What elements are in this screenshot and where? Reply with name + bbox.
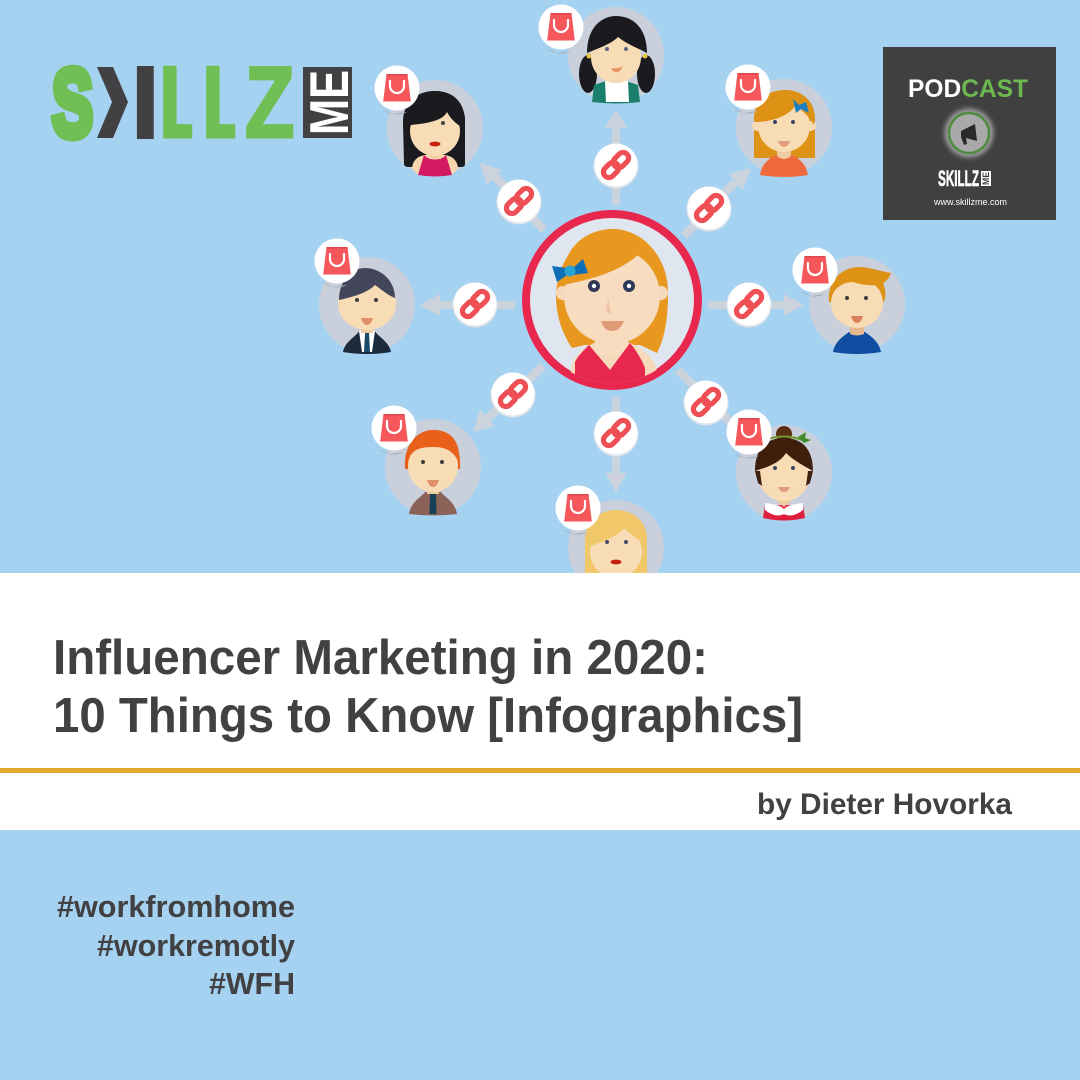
podcast small logo: ME — [981, 172, 991, 185]
icon: shopping bag badge, orange-haired girl — [726, 64, 770, 113]
central influencer avatar — [526, 214, 698, 395]
follower: bun-haired girl — [736, 425, 832, 521]
gold divider — [0, 768, 1080, 773]
title: 10 Things to Know [Infographics] — [53, 689, 803, 743]
icon: chain link, right — [726, 282, 772, 328]
arrow: to bottom follower — [605, 397, 627, 492]
podcast url: www.skillzme.com — [933, 197, 1007, 207]
icon: chain link, upper right — [686, 186, 732, 232]
arrow: to upper-left follower — [480, 163, 547, 233]
icon: chain link, left — [452, 282, 498, 328]
icon: shopping bag badge, blond boy — [792, 248, 838, 296]
title — [53, 631, 803, 743]
follower: orange-haired girl with bow — [736, 79, 832, 177]
logo letters L L: L — [161, 47, 187, 159]
icon: shopping bag badge, red-haired man — [372, 406, 416, 454]
follower: man in suit — [319, 257, 415, 354]
arrow: to lower-right follower — [675, 367, 739, 431]
hashtags: #WFH — [209, 966, 295, 1001]
author byline: by Dieter Hovorka — [757, 788, 1012, 821]
network diagram: influencer and followers — [314, 4, 905, 596]
logo ME tag: ME — [298, 70, 360, 135]
podcast heading: PODCAST — [908, 75, 1028, 103]
arrow: to right follower — [708, 294, 803, 316]
follower: girl with pigtails — [568, 7, 664, 104]
icon: shopping bag badge, blonde girl — [556, 486, 600, 534]
icon: shopping bag badge, bun-haired girl — [726, 410, 772, 458]
logo letters L L — [161, 47, 236, 159]
logo letters L L: L — [210, 47, 236, 159]
logo letters L L: L — [204, 47, 230, 159]
logo chevron — [97, 67, 128, 138]
logo letter S: S — [52, 50, 93, 157]
logo letter I: I — [131, 45, 160, 160]
panel: white title band — [0, 573, 1080, 830]
hashtags — [57, 889, 296, 1001]
icon: shopping bag badge, man in suit — [314, 238, 360, 287]
arrow: to lower-left follower — [473, 363, 546, 432]
hashtags: #workfromhome — [57, 889, 295, 924]
hashtags: #workremotly — [97, 928, 296, 963]
icon: chain link, lower left — [490, 372, 536, 418]
arrow: to upper-right follower — [681, 168, 751, 239]
icon: chain link, bottom — [594, 412, 638, 456]
podcast small logo: SKILLZ — [938, 166, 979, 191]
icon: shopping bag badge, black-haired girl — [374, 66, 420, 114]
panel: podcast badge — [883, 47, 1056, 220]
icon: chain link, upper left — [496, 180, 542, 224]
arrow: to left follower — [420, 294, 515, 316]
icon: shopping bag badge, pigtail girl — [538, 4, 584, 53]
icon: chain link, top — [594, 144, 638, 188]
logo letter Z: Z — [245, 46, 294, 159]
arrow: to top follower — [605, 110, 627, 205]
logo: SKILLZ ME — [52, 45, 360, 160]
face — [556, 229, 668, 344]
icon: megaphone — [939, 103, 999, 163]
follower: blond boy — [809, 256, 905, 354]
title: Influencer Marketing in 2020: — [53, 631, 708, 685]
follower: blonde girl — [568, 500, 664, 596]
follower: red-haired man — [385, 419, 481, 516]
icon: chain link, lower right — [684, 380, 728, 426]
logo letters L L: L — [167, 47, 193, 159]
follower: black-haired girl — [387, 80, 483, 176]
podcast small logo — [938, 166, 991, 191]
icon: blue hair bow — [552, 259, 588, 282]
